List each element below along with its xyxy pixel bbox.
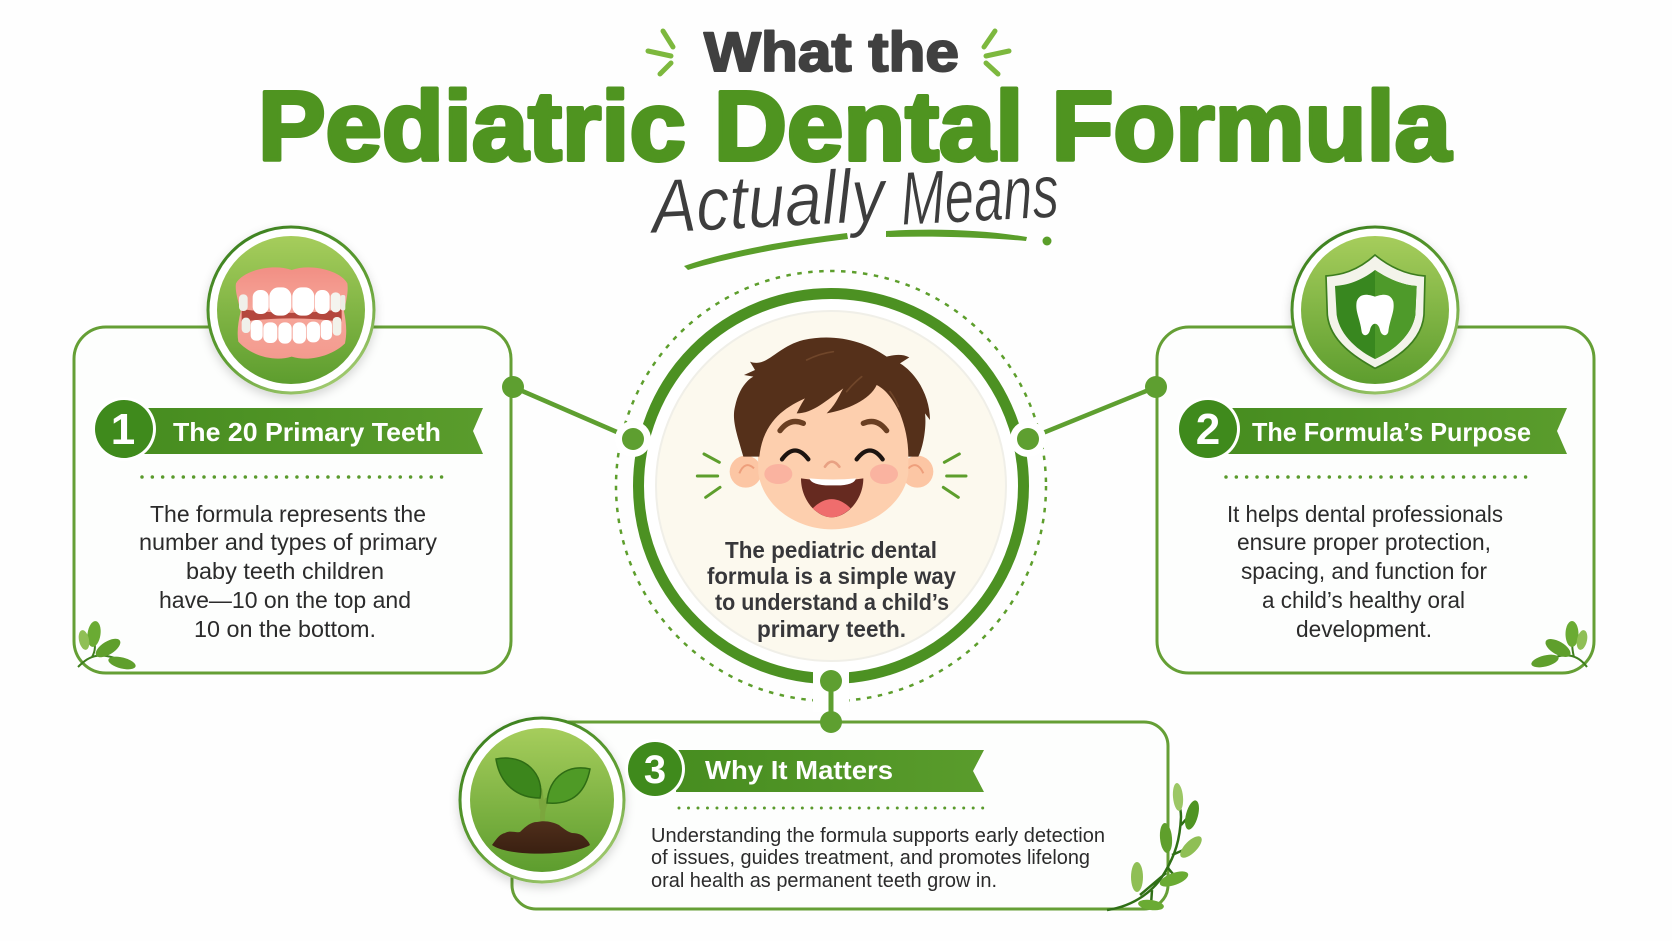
- body text 3: oral health as permanent teeth grow in.: [651, 870, 997, 892]
- body text 2: ensure proper protection,: [1237, 529, 1491, 555]
- centre text: primary teeth.: [757, 616, 906, 642]
- centre text: formula is a simple way: [707, 563, 956, 589]
- node: card 2 connector: [1145, 376, 1167, 398]
- ribbon heading 1: The 20 Primary Teeth: [173, 417, 441, 447]
- body text 3: of issues, guides treatment, and promotes lifelong: [651, 847, 1090, 869]
- panel: the 20 primary teeth: [74, 227, 511, 673]
- title line: Actually Means: Means: [898, 149, 1061, 242]
- ribbon heading 3: Why It Matters: [705, 755, 893, 785]
- panel: the formula's purpose: [1157, 227, 1594, 673]
- dashed outer ring: [616, 271, 1046, 701]
- body text 1: The formula represents the: [150, 501, 426, 527]
- node: card 1 connector: [502, 376, 524, 398]
- connector: card 1 to centre: [513, 387, 633, 439]
- panel: why it matters: [460, 681, 1205, 912]
- ribbon heading 1: 1: [111, 405, 135, 454]
- title line: What the: What the: [704, 20, 959, 83]
- leaf sprig 1: [77, 620, 137, 672]
- body text 2: development.: [1296, 616, 1432, 642]
- body text 1: number and types of primary: [139, 529, 438, 555]
- body text 1: [139, 501, 438, 642]
- node: card 3 connector: [820, 711, 842, 733]
- title line: Pediatric Dental Formula: Pediatric Dental Formula: [258, 71, 1453, 181]
- body text 2: It helps dental professionals: [1227, 501, 1503, 527]
- icon: seedling: [460, 718, 624, 882]
- centre text: to understand a child’s: [715, 589, 949, 615]
- title line: Actually Means: Actually: [646, 153, 890, 250]
- body text 2: spacing, and function for: [1241, 558, 1487, 584]
- sparkles right: [984, 31, 1009, 74]
- connector: card 2 to centre: [1028, 387, 1156, 439]
- ribbon heading 2: [1176, 397, 1567, 461]
- thick green ring: [638, 294, 1024, 678]
- icon: shield with tooth: [1292, 227, 1458, 393]
- ribbon heading 2: 2: [1196, 405, 1220, 454]
- node halos and nodes: [615, 421, 1046, 712]
- sparkles left: [648, 31, 673, 74]
- title line: Actually Means: [646, 149, 1061, 250]
- body text 3: Understanding the formula supports early detection: [651, 825, 1105, 847]
- body text 3: [651, 825, 1105, 892]
- body text 1: baby teeth children: [186, 558, 384, 584]
- body text 2: [1227, 501, 1503, 642]
- ribbon heading 3: 3: [644, 748, 666, 792]
- ribbon heading 1: [92, 397, 483, 461]
- body text 1: have—10 on the top and: [159, 587, 411, 613]
- centre text: [707, 537, 956, 642]
- title: [258, 20, 1453, 270]
- body text 1: 10 on the bottom.: [194, 616, 376, 642]
- centre text: The pediatric dental: [725, 537, 937, 563]
- ribbon heading 3: [625, 739, 984, 799]
- illustration: smiling child: [697, 337, 966, 529]
- centre medallion: [615, 271, 1046, 712]
- title underline swoosh: [684, 230, 1052, 270]
- ribbon heading 2: The Formula’s Purpose: [1252, 417, 1531, 447]
- icon: teeth: [208, 227, 374, 393]
- leaf sprig 3: [1107, 783, 1205, 912]
- leaf sprig 2: [1530, 621, 1589, 670]
- body text 2: a child’s healthy oral: [1262, 587, 1465, 613]
- connector: centre to card 3: [828, 681, 834, 722]
- cream inner disc: [656, 311, 1006, 661]
